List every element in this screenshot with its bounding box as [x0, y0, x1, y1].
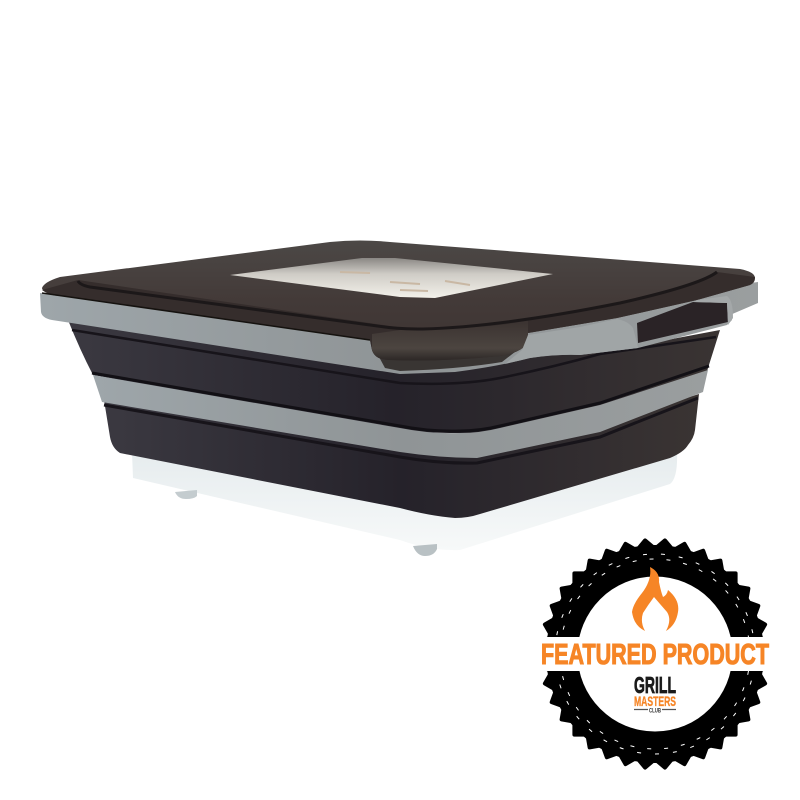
sticker marks: [340, 272, 470, 291]
gray middle band: [93, 370, 708, 458]
flame icon: [632, 567, 678, 631]
dark line under gray band: [104, 398, 698, 463]
lower dark section: [104, 394, 699, 518]
product: collapsible tub with lid: [40, 240, 758, 556]
upper dark section: [68, 320, 720, 434]
stitched ring: [560, 559, 750, 749]
lid label sticker: [230, 258, 553, 298]
handle gray piece: [505, 319, 638, 364]
lid front lip: [42, 272, 755, 360]
left foot: [175, 490, 197, 499]
base tray: [132, 452, 677, 550]
lower fold line: [92, 366, 709, 431]
right foot: [413, 544, 437, 556]
logo rules: [634, 708, 676, 710]
gray rim: [40, 282, 758, 374]
lid tab: [372, 320, 528, 360]
lid: [42, 240, 755, 360]
logo: club: CLUB: [649, 708, 661, 714]
badge: featured product: [535, 540, 775, 768]
dark shadow under lid tab: [378, 348, 520, 371]
rim edge shadow: [42, 293, 370, 340]
logo: masters: MASTERS: [634, 693, 676, 709]
handle dark grip: [637, 302, 728, 343]
scalloped black seal: [541, 540, 769, 768]
handle gray top: [693, 296, 733, 325]
zigzag stitches: [555, 554, 755, 754]
upper fold line: [72, 330, 716, 384]
logo: grill: GRILL: [634, 672, 676, 698]
white center circle: [578, 576, 732, 732]
lid groove: [78, 272, 717, 329]
white band: [535, 637, 775, 671]
